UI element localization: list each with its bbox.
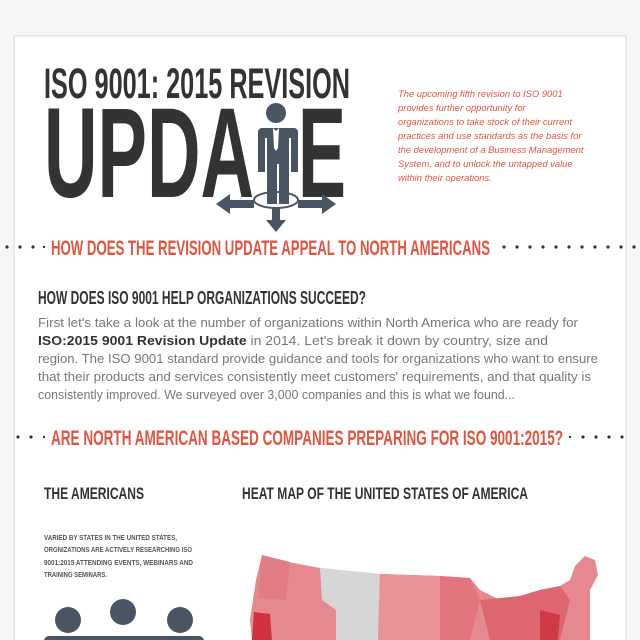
heading: heat map: HEAT MAP OF THE UNITED STATES OF AMERICA bbox=[242, 484, 528, 503]
text block: americans description bbox=[44, 533, 193, 579]
heading: how does ISO 9001 help: HOW DOES ISO 9001 HELP ORGANIZATIONS SUCCEED? bbox=[38, 288, 366, 308]
text block: survey paragraph: ISO:2015 9001 Revision Update in 2014. Let's break it down by country, size and bbox=[38, 333, 548, 348]
title: UPDATE: E bbox=[298, 82, 346, 225]
text block: americans description: ORGNIZATIONS ARE ACTIVELY RESEARCHING ISO bbox=[44, 545, 192, 554]
text block: survey paragraph bbox=[38, 315, 598, 402]
text block: intro: practices and use standards as the basis for bbox=[397, 130, 582, 141]
text block: intro: the development of a Business Management bbox=[398, 144, 584, 155]
title: UPDATE: UPDA bbox=[44, 82, 254, 225]
text block: intro: provides further opportunity for bbox=[397, 102, 527, 113]
icon: businessman with arrows bbox=[216, 103, 336, 232]
text block: intro: within their operations. bbox=[398, 172, 492, 183]
text block: intro: System, and to unlock the untapped value bbox=[398, 158, 573, 169]
text block: americans description: 9001:2015 ATTENDING EVENTS, WEBINARS AND bbox=[44, 558, 193, 567]
text block: americans description: TRAINING SEMINARS. bbox=[44, 570, 107, 579]
text block: survey paragraph: First let's take a look at the number of organizations within North America who are ready for bbox=[38, 315, 579, 330]
text block: survey paragraph: consistently improved. We surveyed over 3,000 companies and this is what we found... bbox=[38, 387, 515, 402]
icon: group of people bbox=[44, 599, 204, 640]
text block: intro: The upcoming fifth revision to ISO 9001 bbox=[398, 88, 563, 99]
text block: intro: organizations to take stock of their current bbox=[398, 116, 572, 127]
text block: survey paragraph: that their products and services consistently meet customers' requirements, and that quality is bbox=[38, 369, 592, 384]
text block: survey paragraph: region. The ISO 9001 standard provide guidance and tools for organizations who want to ensure bbox=[38, 351, 598, 366]
heading: the americans: THE AMERICANS bbox=[44, 484, 144, 503]
text block: americans description: VARIED BY STATES IN THE UNITED STATES, bbox=[44, 533, 177, 542]
title: ISO 9001 2015 revision: ISO 9001: 2015 REVISION bbox=[44, 60, 350, 108]
chart: US heat map bbox=[250, 555, 598, 640]
text block: intro bbox=[397, 88, 584, 183]
